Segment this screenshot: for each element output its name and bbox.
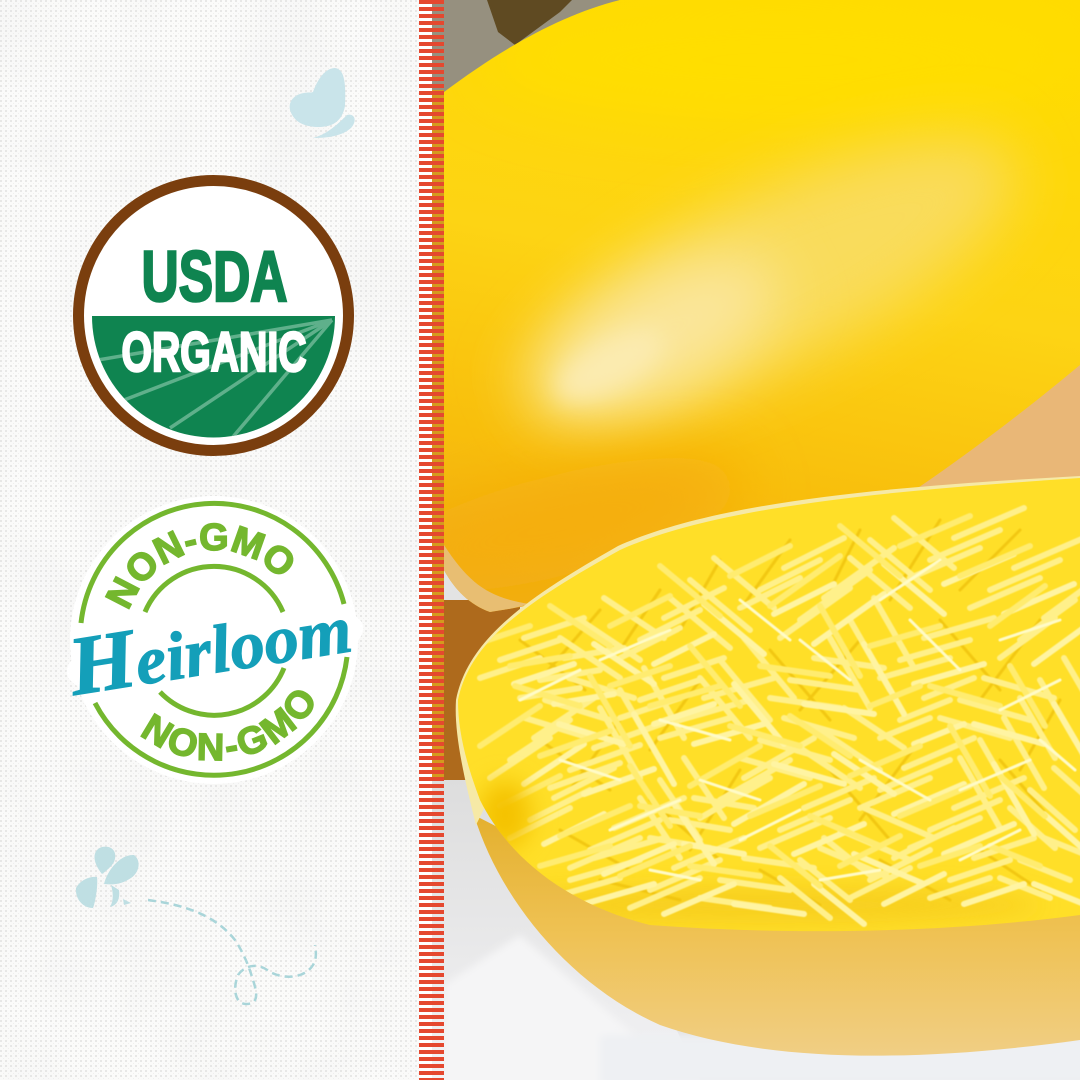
cut squash rind — [474, 815, 1080, 1056]
cut squash flesh — [450, 470, 1080, 940]
outer and inner rings — [81, 503, 347, 775]
decorative stripe border — [419, 0, 444, 1080]
USDA wordmark: USDA — [142, 238, 288, 317]
dashed flight path — [148, 900, 316, 1004]
ORGANIC wordmark: ORGANIC — [122, 320, 306, 383]
bee — [76, 847, 139, 908]
squash strands, pale — [470, 508, 1080, 924]
top NON-GMO: NON-GMO — [104, 522, 294, 610]
bottom NON-GMO: NON-GMO — [140, 690, 314, 761]
squash strands, shadow — [520, 520, 1060, 905]
dark hollow at left of flesh — [479, 781, 531, 849]
badge: USDA Organic — [78, 180, 348, 450]
icon: bee with dashed flight path — [76, 847, 316, 1004]
green field — [92, 316, 335, 438]
squash strands, highlight — [520, 560, 1075, 880]
Heirloom script: Heirloom — [61, 578, 357, 714]
badge: Heirloom Non-GMO — [61, 496, 364, 784]
icon: butterfly — [290, 68, 355, 138]
photo background — [432, 0, 1080, 1080]
whole squash — [444, 0, 1080, 612]
photo: spaghetti squash — [364, 0, 1080, 1080]
panel: linen fabric background — [0, 0, 432, 1080]
